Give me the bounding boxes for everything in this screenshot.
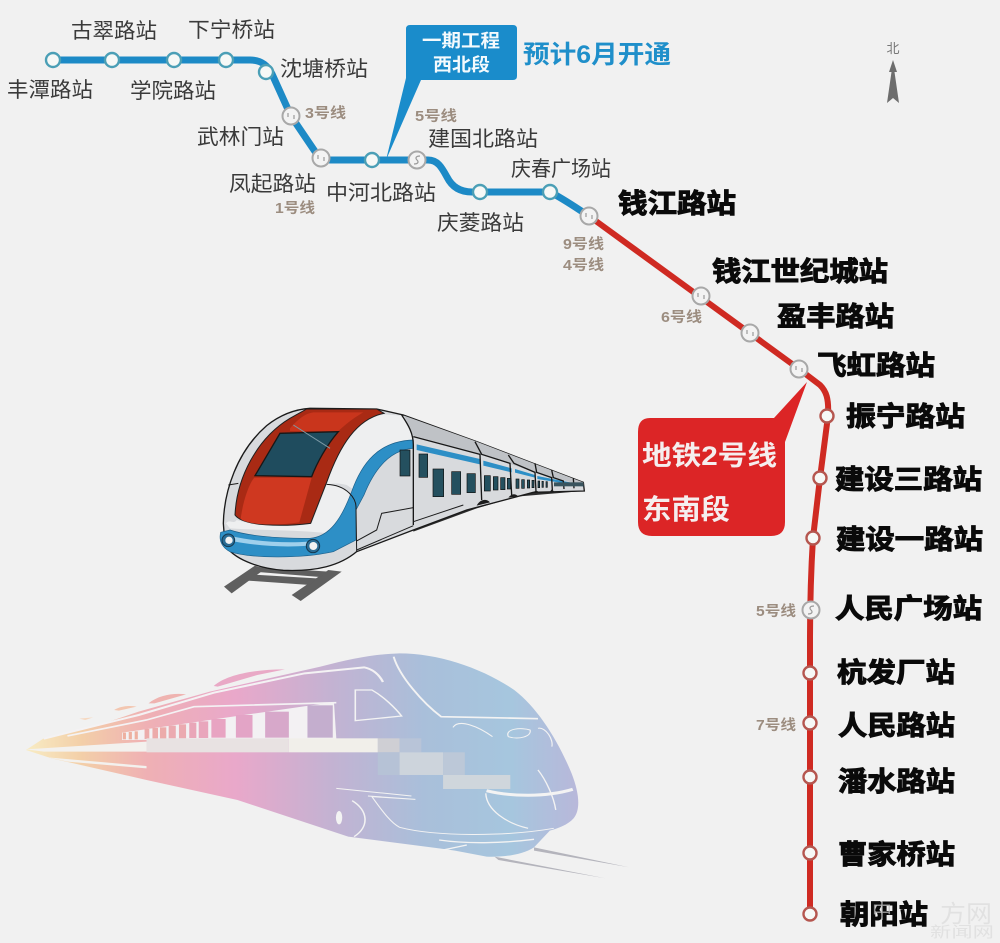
station labels: red section: 钱江路站 xyxy=(618,189,736,219)
station labels: blue section: 武林门站 xyxy=(197,126,284,149)
station labels: red section xyxy=(618,189,983,930)
lines xyxy=(402,415,574,525)
callout: south-east section: 地铁2号线 xyxy=(642,441,777,471)
windscreen xyxy=(255,432,338,477)
station labels: blue section: 凤起路站 xyxy=(229,173,316,196)
station labels: blue section: 丰潭路站 xyxy=(7,79,93,102)
interchange line labels: 4号线 xyxy=(563,256,605,274)
windows xyxy=(400,450,583,497)
lower red panel xyxy=(241,478,312,525)
blue stripe xyxy=(220,440,413,557)
line path xyxy=(53,60,589,216)
station labels: blue section: 古翠路站 xyxy=(71,20,157,43)
north arrow: 北 xyxy=(886,41,900,56)
station labels: blue section: 庆菱路站 xyxy=(437,212,524,235)
interchange line labels: 3号线 xyxy=(305,104,347,122)
station labels: red section: 人民广场站 xyxy=(835,594,982,624)
body xyxy=(223,408,584,571)
interchange line labels xyxy=(275,104,797,734)
station labels: red section: 杭发厂站 xyxy=(837,658,955,688)
station labels: blue section: 沈塘桥站 xyxy=(280,58,368,81)
stations xyxy=(804,410,834,920)
station labels: red section: 建设三路站 xyxy=(835,465,982,495)
station labels: red section: 曹家桥站 xyxy=(838,840,955,870)
headlights xyxy=(222,534,235,547)
watermark: 中 xyxy=(872,900,892,923)
illustration: metro train xyxy=(220,408,584,601)
watermark: 方网 xyxy=(940,901,992,928)
station labels: blue section: 学院路站 xyxy=(130,80,216,103)
station labels: blue section xyxy=(7,19,611,235)
station labels: red section: 人民路站 xyxy=(838,711,955,741)
roof band xyxy=(404,416,583,486)
line path xyxy=(589,216,828,914)
interchange line labels: 7号线 xyxy=(756,716,797,734)
interchange line labels: 9号线 xyxy=(563,235,605,253)
station labels: red section: 钱江世纪城站 xyxy=(712,256,888,287)
shadow xyxy=(413,487,583,532)
station labels: red section: 潘水路站 xyxy=(838,767,955,797)
station labels: red section: 建设一路站 xyxy=(836,525,983,555)
stations xyxy=(46,53,557,199)
blue line: north-west section xyxy=(46,53,589,216)
interchange stations xyxy=(282,108,820,618)
interchange line labels: 6号线 xyxy=(661,308,703,326)
track xyxy=(224,566,342,601)
interchange line labels: 5号线 xyxy=(415,107,458,125)
station labels: red section: 朝阳站 xyxy=(840,900,928,930)
watermark: 新闻网 xyxy=(930,924,994,941)
heading: opening date: 预计6月开通 xyxy=(523,41,671,69)
north arrow xyxy=(886,41,900,103)
red line: south-east section xyxy=(589,216,834,920)
red canopy xyxy=(235,409,384,525)
station labels: red section: 振宁路站 xyxy=(846,402,965,432)
callout: north-west section xyxy=(386,25,517,160)
station labels: red section: 盈丰路站 xyxy=(777,302,894,332)
station labels: blue section: 庆春广场站 xyxy=(511,158,611,181)
station labels: blue section: 建国北路站 xyxy=(428,128,538,151)
illustration: blurred rainbow train xyxy=(26,653,629,878)
watermark xyxy=(872,900,994,941)
station labels: red section: 飞虹路站 xyxy=(817,351,935,381)
interchange line labels: 1号线 xyxy=(275,199,316,217)
station labels: blue section: 下宁桥站 xyxy=(188,19,275,42)
interchange line labels: 5号线 xyxy=(756,602,797,620)
station labels: blue section: 中河北路站 xyxy=(326,182,436,205)
callout: north-west section: 一期工程 xyxy=(422,31,500,51)
callout: north-west section: 西北段 xyxy=(433,54,490,75)
callout: south-east section: 东南段 xyxy=(642,494,730,525)
callout: south-east section xyxy=(638,382,807,536)
bogies xyxy=(477,489,554,506)
